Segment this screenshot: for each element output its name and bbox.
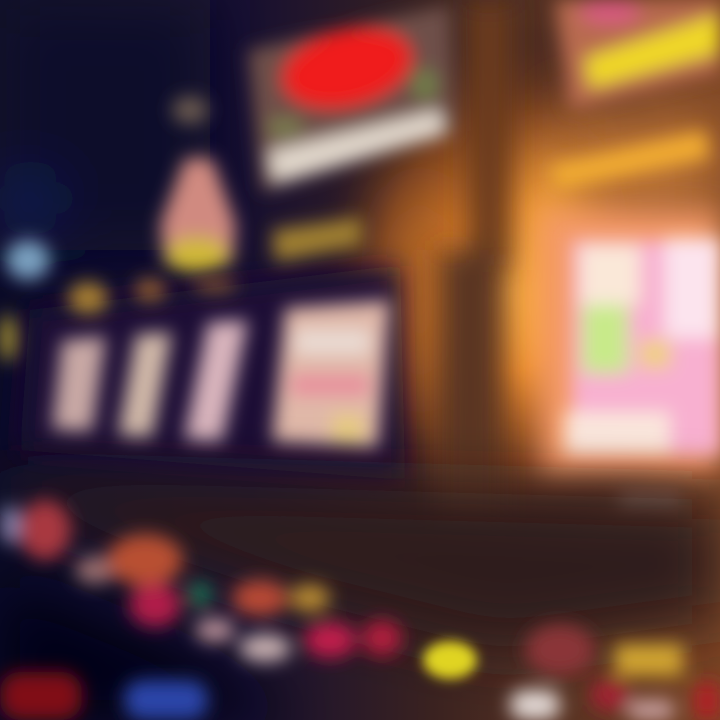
sign red oval bbox=[274, 15, 420, 121]
dark pillar bbox=[438, 0, 512, 520]
reel 2 bbox=[118, 332, 172, 438]
reel 3 bbox=[184, 320, 248, 442]
screen light patch bbox=[580, 245, 640, 305]
machine row bbox=[20, 265, 405, 480]
bottom right lights bbox=[510, 624, 720, 720]
warm area above right screen bbox=[560, 110, 720, 230]
bottom left lights bbox=[0, 672, 208, 720]
reel 1 bbox=[52, 336, 106, 432]
screen white bottom bbox=[565, 412, 670, 454]
reel 4 large bbox=[272, 300, 390, 448]
bright glow right of pillar bbox=[398, 150, 581, 400]
right screen bbox=[540, 210, 720, 475]
bottom lights cluster bbox=[0, 500, 402, 662]
yellow button bbox=[423, 641, 477, 679]
right upper yellow label bbox=[550, 130, 710, 190]
machine top lights bbox=[0, 217, 362, 362]
screen green patch bbox=[582, 305, 628, 373]
bottle-shaped topper bbox=[160, 96, 236, 273]
dark upper-left wall bbox=[0, 0, 210, 250]
top right sign bbox=[555, 0, 720, 110]
sign white band bbox=[268, 110, 445, 182]
orange light glow bbox=[310, 20, 710, 560]
top sign bbox=[248, 5, 455, 192]
counter dark base bbox=[0, 480, 720, 720]
